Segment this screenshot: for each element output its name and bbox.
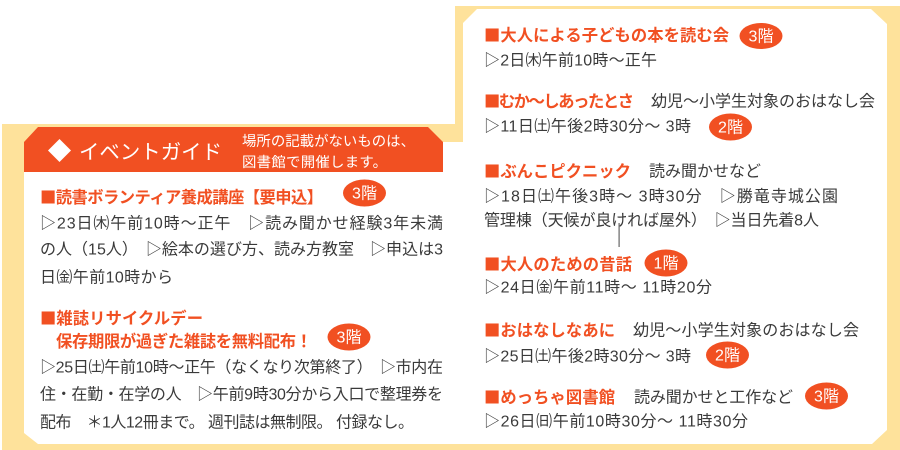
event: magazine recycling day: 保存期限が過ぎた雑誌を無料配布！ (56, 332, 312, 351)
event: reading volunteer course: の人（15人） ▷絵本の選び方、読み方教室 ▷申込は3 (40, 236, 443, 260)
badge: 3rd floor (328, 324, 370, 350)
event: ohanashi na ani (484, 317, 859, 368)
event: magazine recycling day: ■雑誌リサイクルデー (40, 305, 203, 329)
event: mukashi attatosa (484, 88, 875, 140)
event: mukashi attatosa: ■むか～しあったとさ (484, 88, 634, 112)
event: magazine recycling day: 配布 ＊1人12冊まで。 週刊誌は無制限。 付録なし。 (40, 414, 414, 432)
event: reading volunteer course: ■読書ボランティア養成講座【要申込】 (40, 184, 323, 208)
badge: 2nd floor: 2階 (718, 118, 743, 136)
event: meccha library: 読み聞かせと工作など (634, 388, 793, 406)
note: venue information: 図書館で開催します。 (242, 154, 387, 171)
event: magazine recycling day (40, 305, 443, 432)
event: ohanashi na ani: ▷25日㈯午後2時30分～ 3時 (484, 342, 691, 366)
event: magazine recycling day: ▷25日㈯午前10時～正午（なくなり次第終了） ▷市内在 (40, 354, 443, 378)
event: mukashi attatosa: ▷11日㈯午後2時30分～ 3時 (484, 112, 691, 136)
event: folk tales for adults: ■大人のための昔話 (484, 251, 632, 275)
event: ohanashi na ani: 幼児～小学生対象のおはなし会 (633, 322, 859, 340)
event: adults reading children's books: ■大人による子どもの本を読む会 (484, 22, 729, 46)
icon: diamond (48, 139, 71, 162)
badge: 3rd floor (343, 180, 386, 206)
badge: 3rd floor: 3階 (749, 28, 773, 46)
badge: 3rd floor (740, 23, 782, 49)
event: reading volunteer course (40, 180, 443, 286)
badge: 3rd floor (805, 382, 848, 410)
event: bunko picnic (484, 158, 838, 230)
badge: 1st floor (644, 250, 688, 276)
event: bunko picnic: ■ぶんこピクニック (484, 158, 631, 182)
header banner (24, 127, 443, 172)
heading: event guide: イベントガイド (79, 141, 222, 164)
badge: 3rd floor: 3階 (352, 184, 377, 202)
panel: event guide header (24, 127, 443, 172)
event: adults reading children's books (484, 22, 782, 70)
badge: 3rd floor: 3階 (337, 328, 361, 346)
event: ohanashi na ani: ■おはなしなあに (484, 317, 615, 341)
event: magazine recycling day: 住・在勤・在学の人 ▷午前9時30分から入口で整理券を (40, 380, 443, 404)
event: bunko picnic: ▷18日㈯午後3時～ 3時30分 ▷勝竜寺城公園 (484, 182, 838, 206)
event: adults reading children's books: ▷2日㈭午前10時～正午 (484, 46, 657, 70)
event: reading volunteer course: 日㈮午前10時から (40, 268, 173, 286)
event: meccha library: ▷26日㈰午前10時30分～ 11時30分 (484, 408, 748, 432)
event: bunko picnic: 読み聞かせなど (649, 162, 761, 180)
event: meccha library: ■めっちゃ図書館 (484, 384, 615, 408)
divider: vertical rule (618, 223, 620, 247)
event: mukashi attatosa: 幼児～小学生対象のおはなし会 (651, 92, 875, 110)
badge: 2nd floor (709, 114, 752, 140)
note: venue information: 場所の記載がないものは、 (242, 133, 415, 150)
badge: 1st floor: 1階 (654, 254, 678, 272)
event: folk tales for adults (484, 250, 712, 298)
note: venue information (242, 133, 415, 171)
badge: 3rd floor: 3階 (814, 388, 839, 406)
event: meccha library (484, 382, 848, 432)
event: folk tales for adults: ▷24日㈮午前11時～ 11時20分 (484, 274, 712, 298)
badge: 2nd floor: 2階 (715, 346, 740, 364)
event: reading volunteer course: ▷23日㈭午前10時～正午 ▷読み聞かせ経験3年未満 (40, 210, 443, 234)
badge: 2nd floor (706, 342, 749, 368)
event: bunko picnic: 管理棟（天候が良ければ屋外） ▷当日先着8人 (484, 206, 819, 230)
